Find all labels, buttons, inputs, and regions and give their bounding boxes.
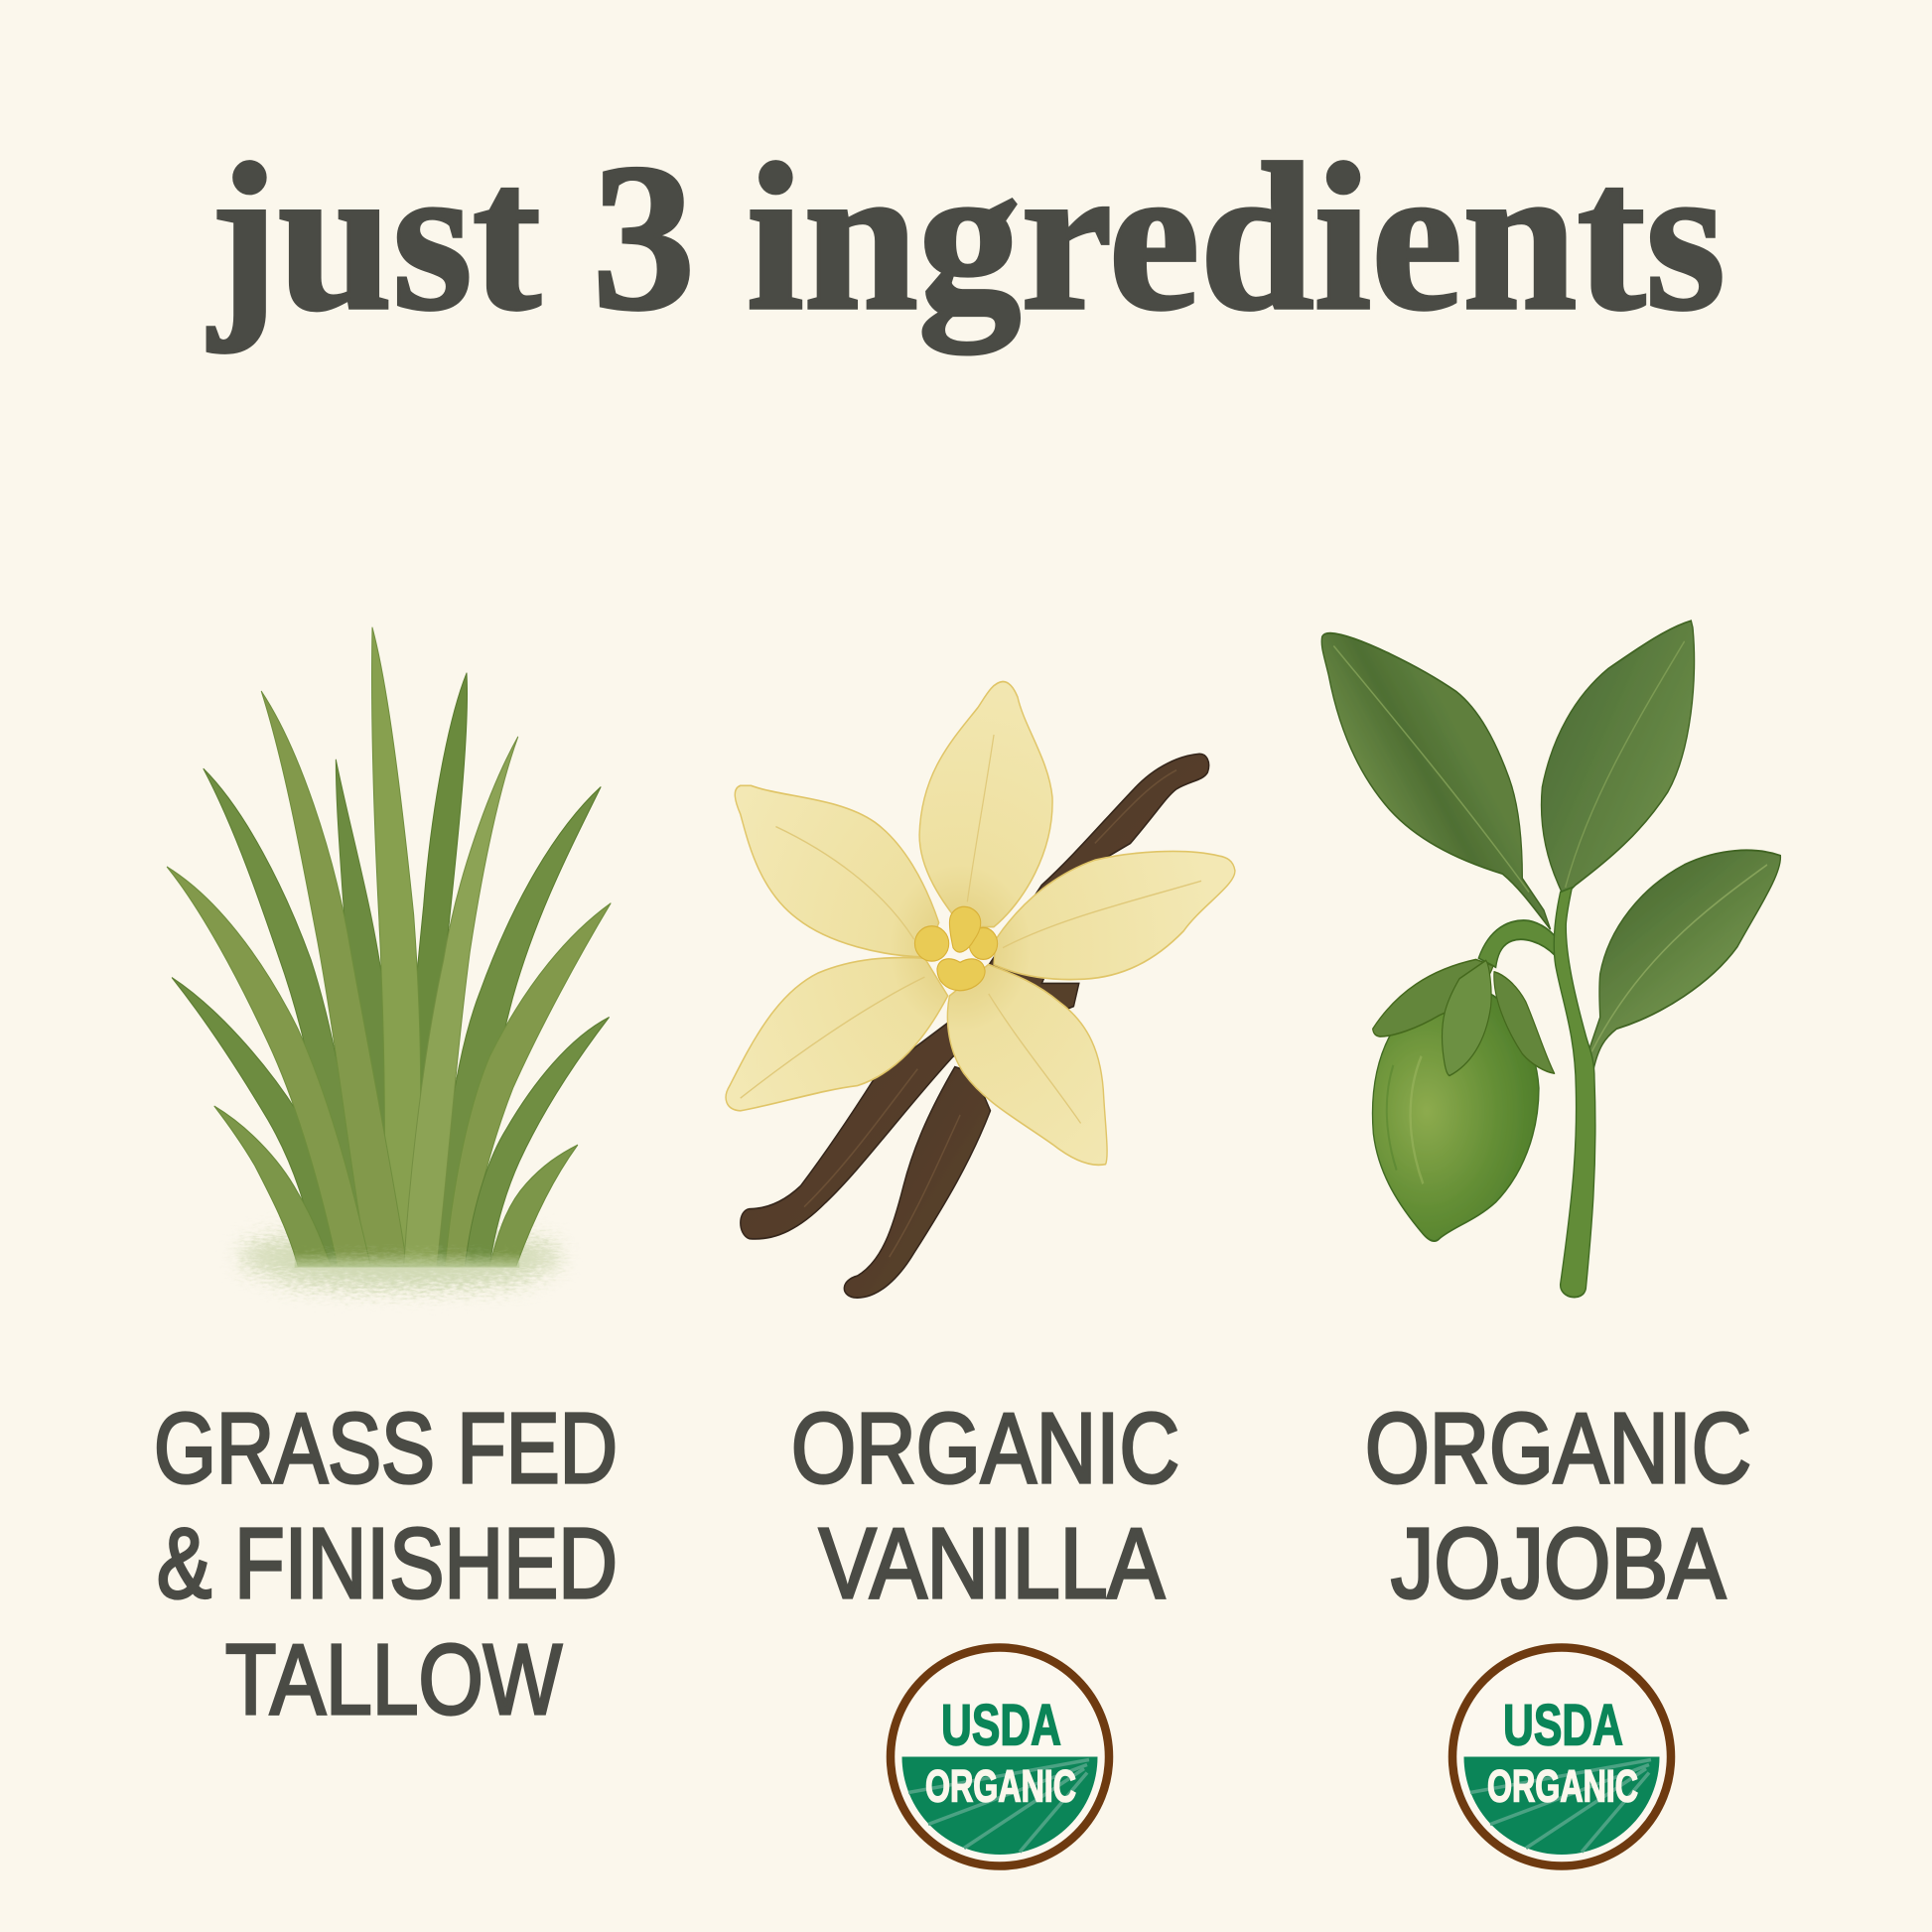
badge: usda organic jojoba: USDA [1503,1694,1623,1757]
badge: usda organic jojoba: ORGANIC [1487,1761,1638,1811]
label: organic vanilla: VANILLA [819,1508,1165,1619]
jojoba fruit stalk [1478,920,1560,967]
label: organic jojoba: JOJOBA [1391,1508,1725,1619]
jojoba stem [1554,888,1595,1298]
label: grass fed and finished tallow: GRASS FED [154,1393,618,1504]
title: just 3 ingredients [207,120,1725,354]
illustration: jojoba branch [1321,621,1780,1298]
label: organic jojoba: ORGANIC [1365,1393,1751,1504]
grass base fade [295,1252,519,1268]
badge: usda organic vanilla: USDA [941,1694,1061,1757]
vanilla pod grain [804,770,1176,1257]
jojoba fruit [1372,985,1539,1241]
label: organic jojoba [1365,1393,1751,1619]
jojoba calyx [1373,959,1555,1076]
badge: usda organic jojoba [1452,1648,1671,1866]
vanilla pod one [741,754,1209,1239]
jojoba leaf upper left [1321,633,1551,929]
grass foreground tuft [271,1265,536,1285]
vanilla petals [726,682,1235,1165]
grass ground tuft [238,1229,563,1284]
illustration: vanilla flower [726,682,1235,1298]
label: grass fed and finished tallow: TALLOW [225,1624,563,1735]
label: grass fed and finished tallow [154,1393,618,1735]
label: organic vanilla [791,1393,1179,1619]
vanilla petal veins [741,735,1201,1123]
vanilla pod two [844,1067,990,1298]
label: organic vanilla: ORGANIC [791,1393,1179,1504]
jojoba leaf top [1541,621,1695,897]
illustration: grass [167,627,611,1285]
vanilla center [914,906,998,991]
badge: usda organic vanilla: ORGANIC [925,1761,1076,1811]
label: grass fed and finished tallow: & FINISHED [157,1508,618,1619]
badge: usda organic vanilla [891,1648,1109,1866]
jojoba leaf right [1588,850,1780,1070]
